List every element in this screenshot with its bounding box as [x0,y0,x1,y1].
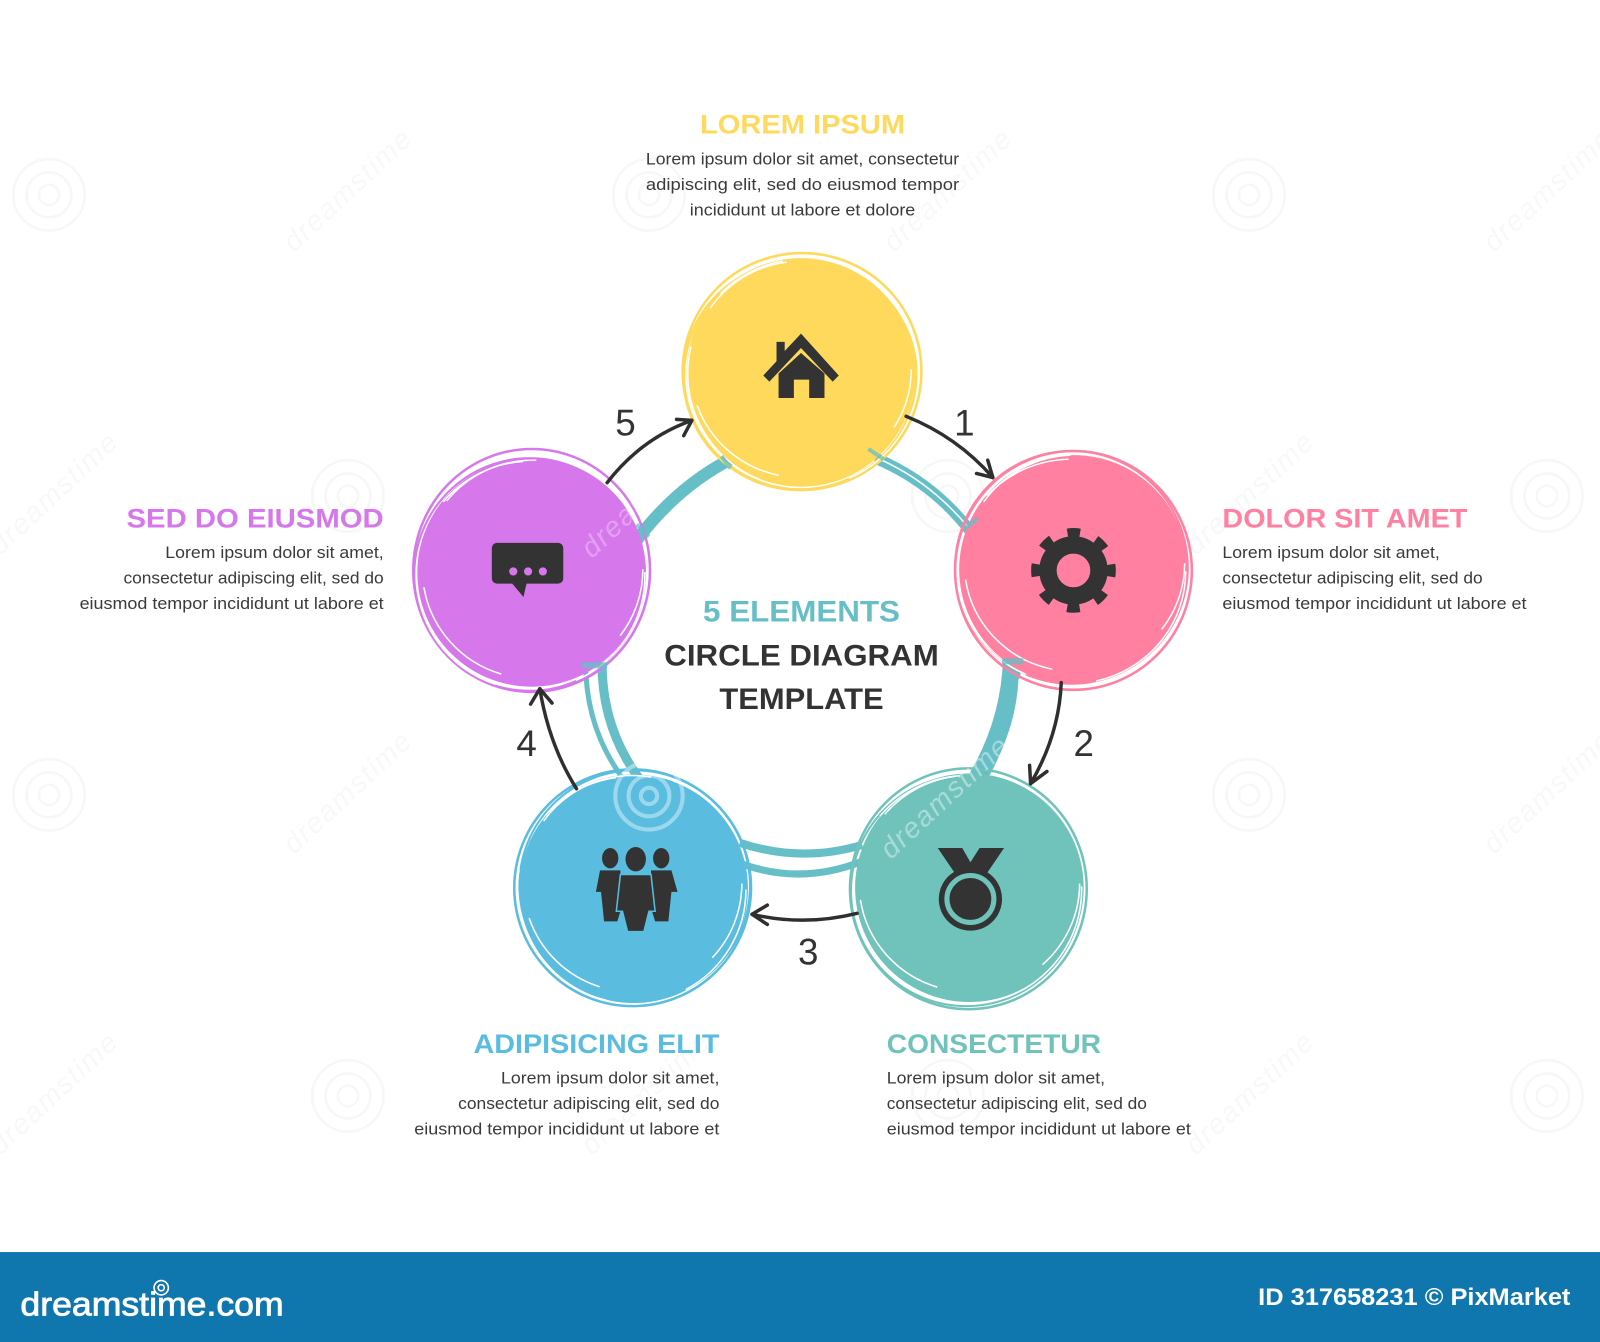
watermark pattern: dreamstime [1179,1026,1320,1161]
footer logo text: dreamstime.com [20,1286,284,1323]
text block: adipisicing elit: ADIPISICING ELIT [473,1029,719,1059]
watermark pattern [0,123,1600,1161]
step number 1: 1 [954,403,974,444]
text block: adipisicing elit: eiusmod tempor incididunt ut labore et [414,1120,720,1139]
step number 5: 5 [615,403,636,444]
text block: lorem ipsum: adipiscing elit, sed do eiusmod tempor [646,175,960,194]
node: yellow circle (lorem ipsum) [683,253,921,490]
text block: consectetur: CONSECTETUR [887,1029,1101,1059]
icon: medal [938,848,1004,931]
node: purple circle (sed do eiusmod) [413,449,650,692]
text block: consectetur: consectetur adipiscing elit, sed do [887,1094,1147,1113]
text block: dolor sit amet: Lorem ipsum dolor sit amet, [1222,543,1440,562]
ring stubs over circle edges [582,449,1023,665]
node: blue circle (adipisicing elit) [514,769,751,1006]
icon: house [763,334,839,398]
arrow 4 [531,689,577,789]
text block: dolor sit amet: consectetur adipiscing elit, sed do [1222,569,1483,588]
watermark pattern: dreamstime [277,725,418,860]
text block: dolor sit amet [1222,504,1527,613]
icon: gear [1037,534,1110,607]
watermark pattern: dreamstime [1179,426,1320,561]
text block: sed do eiusmod: eiusmod tempor incididunt ut labore et [80,594,384,613]
text block: consectetur [887,1029,1191,1139]
watermark pattern: dreamstime [277,123,418,258]
node: teal circle (consectetur) [850,768,1087,1009]
text block: adipisicing elit: consectetur adipiscing elit, sed do [458,1094,719,1113]
watermark over circles: dreamstime [874,731,1015,865]
center title: CIRCLE DIAGRAM [664,639,939,672]
node: pink circle (dolor sit amet) [955,451,1192,690]
text block: consectetur: Lorem ipsum dolor sit amet, [887,1069,1105,1088]
arrow 1 [906,416,993,478]
text block: dolor sit amet: DOLOR SIT AMET [1222,504,1467,534]
connecting ring [586,458,1019,874]
text block: dolor sit amet: eiusmod tempor incididunt ut labore et [1222,594,1527,613]
text block: sed do eiusmod [80,504,384,613]
text block: adipisicing elit [414,1029,720,1139]
text block: sed do eiusmod: SED DO EIUSMOD [127,504,384,534]
text block: lorem ipsum: Lorem ipsum dolor sit amet, consectetur [646,149,960,168]
text block: lorem ipsum: incididunt ut labore et dolore [690,200,915,219]
footer bar [0,1252,1600,1342]
watermark over circles: dreamstime [575,430,716,564]
watermark over circles [575,430,1015,865]
center title [664,595,939,716]
center title: TEMPLATE [719,683,884,716]
arrow 5 [607,419,692,483]
arrow 2 [1030,683,1061,784]
center title: 5 ELEMENTS [703,595,900,628]
step number 4: 4 [516,723,537,764]
text block: sed do eiusmod: consectetur adipiscing elit, sed do [123,569,384,588]
watermark pattern: dreamstime [877,123,1018,258]
text block: sed do eiusmod: Lorem ipsum dolor sit amet, [165,543,384,562]
footer spiral icon [154,1281,168,1295]
text block: lorem ipsum [646,110,960,219]
text block: consectetur: eiusmod tempor incididunt ut labore et [887,1120,1191,1139]
arrow 3 [752,905,857,924]
step number 3: 3 [798,931,818,972]
step number 2: 2 [1073,723,1094,764]
icon: speech bubble [492,543,563,597]
watermark pattern: dreamstime [575,1026,716,1161]
icon: three people [596,847,678,932]
footer credit: ID 317658231 © PixMarket [1258,1284,1570,1311]
text block: lorem ipsum: LOREM IPSUM [700,110,905,140]
text block: adipisicing elit: Lorem ipsum dolor sit amet, [501,1069,719,1088]
